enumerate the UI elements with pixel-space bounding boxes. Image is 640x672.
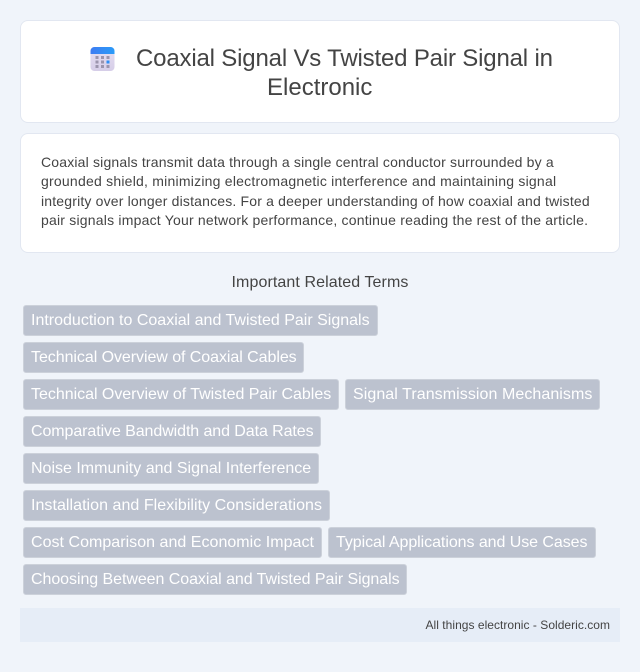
tag: cost: Cost Comparison and Economic Impact <box>31 534 314 551</box>
footer: All things electronic - Solderic.com <box>426 618 610 632</box>
tag: installation <box>23 490 330 521</box>
tag: transmission mechanisms <box>345 379 600 410</box>
tag: twisted pair overview <box>23 379 339 410</box>
tag: bandwidth: Comparative Bandwidth and Data Rates <box>31 423 314 440</box>
tag: twisted pair overview: Technical Overview of Twisted Pair Cables <box>31 386 331 403</box>
tag: coaxial overview: Technical Overview of Coaxial Cables <box>31 349 297 366</box>
tag: cost <box>23 527 322 558</box>
panel: intro text <box>20 133 620 253</box>
tag: introduction: Introduction to Coaxial and Twisted Pair Signals <box>31 312 370 329</box>
tag: bandwidth <box>23 416 321 447</box>
tag: choosing <box>23 564 407 595</box>
tag: noise immunity <box>23 453 319 484</box>
tag: applications: Typical Applications and Use Cases <box>336 534 587 551</box>
intro paragraph: grounded shield, minimizing electromagnetic interference and maintaining signal <box>41 173 556 189</box>
panel: title card <box>20 20 620 123</box>
tag: installation: Installation and Flexibility Considerations <box>31 497 322 514</box>
heading: related terms: Important Related Terms <box>232 274 408 291</box>
intro paragraph <box>41 154 590 228</box>
footer <box>20 608 620 642</box>
tag: transmission mechanisms: Signal Transmission Mechanisms <box>353 386 592 403</box>
tag: noise immunity: Noise Immunity and Signal Interference <box>31 460 311 477</box>
title: Coaxial Signal Vs Twisted Pair Signal in <box>136 45 553 72</box>
tag: introduction <box>23 305 378 336</box>
title: Electronic <box>267 74 372 101</box>
intro paragraph: pair signals impact Your network performance, continue reading the rest of the article. <box>41 212 588 228</box>
tag: choosing: Choosing Between Coaxial and Twisted Pair Signals <box>31 571 400 588</box>
tag: coaxial overview <box>23 342 304 373</box>
icon: calendar <box>90 47 114 71</box>
tag: applications <box>328 527 596 558</box>
intro paragraph: Coaxial signals transmit data through a single central conductor surrounded by a <box>41 154 554 170</box>
title <box>136 45 553 101</box>
intro paragraph: integrity over longer distances. For a deeper understanding of how coaxial and twisted <box>41 193 590 209</box>
